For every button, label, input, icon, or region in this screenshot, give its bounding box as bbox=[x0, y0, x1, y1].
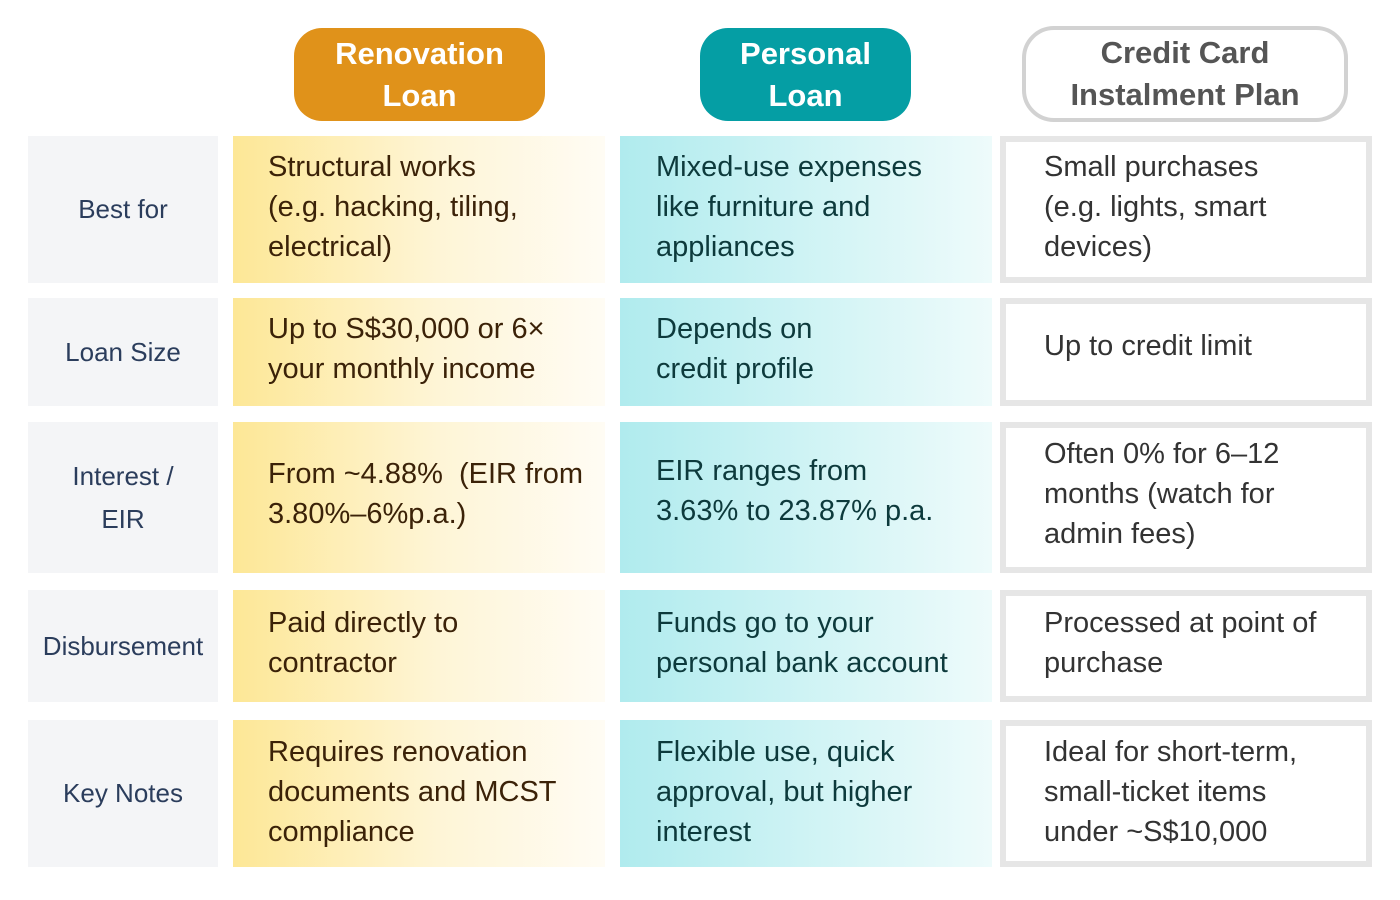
cell: personal key notes: Flexible use, quick bbox=[656, 736, 895, 768]
cell: personal disbursement: personal bank account bbox=[656, 647, 948, 679]
header: Credit Card Instalment Plan bbox=[1022, 26, 1348, 122]
row label: Best for bbox=[28, 136, 218, 283]
cell: renovation best for: electrical) bbox=[268, 231, 392, 263]
cell: personal interest: 3.63% to 23.87% p.a. bbox=[656, 495, 933, 527]
cell: personal interest bbox=[620, 422, 992, 573]
cell: credit loan size bbox=[1000, 298, 1372, 406]
cell: renovation best for bbox=[233, 136, 605, 283]
cell: renovation key notes: documents and MCST bbox=[268, 776, 557, 808]
cell: renovation loan size: your monthly income bbox=[268, 353, 536, 385]
cell: personal key notes bbox=[620, 720, 992, 867]
row label: Interest / EIR: Interest / bbox=[72, 460, 174, 490]
cell: personal loan size bbox=[620, 298, 992, 406]
row label: Disbursement bbox=[28, 590, 218, 702]
cell: renovation loan size bbox=[233, 298, 605, 406]
header: Personal Loan bbox=[700, 28, 911, 121]
cell: credit best for: devices) bbox=[1044, 231, 1152, 263]
cell: credit best for: Small purchases bbox=[1044, 151, 1258, 183]
cell: credit loan size: Up to credit limit bbox=[1044, 330, 1252, 362]
cell: credit interest: admin fees) bbox=[1044, 518, 1196, 550]
cell: renovation key notes bbox=[233, 720, 605, 867]
cell: personal best for: like furniture and bbox=[656, 191, 870, 223]
cell: credit interest bbox=[1000, 422, 1372, 573]
cell: renovation best for: Structural works bbox=[268, 151, 476, 183]
cell: renovation best for: (e.g. hacking, tiling, bbox=[268, 191, 518, 223]
cell: credit disbursement bbox=[1000, 590, 1372, 702]
cell: credit key notes: under ~S$10,000 bbox=[1044, 816, 1267, 848]
cell: credit interest: Often 0% for 6–12 bbox=[1044, 438, 1279, 470]
cell: credit interest: months (watch for bbox=[1044, 478, 1274, 510]
cell: credit key notes bbox=[1000, 720, 1372, 867]
cell: renovation disbursement: Paid directly to bbox=[268, 607, 458, 639]
row label: Best for: Best for bbox=[78, 194, 168, 224]
row label: Loan Size: Loan Size bbox=[65, 336, 181, 366]
cell: renovation disbursement: contractor bbox=[268, 647, 397, 679]
cell: personal interest: EIR ranges from bbox=[656, 455, 867, 487]
cell: renovation disbursement bbox=[233, 590, 605, 702]
cell: personal loan size: credit profile bbox=[656, 353, 814, 385]
cell: renovation interest: 3.80%–6%p.a.) bbox=[268, 498, 466, 530]
row label: Disbursement: Disbursement bbox=[43, 630, 203, 660]
cell: renovation key notes: Requires renovation bbox=[268, 736, 528, 768]
cell: personal best for bbox=[620, 136, 992, 283]
header: Renovation Loan bbox=[294, 28, 545, 121]
row label: Loan Size bbox=[28, 298, 218, 406]
row label: Key Notes: Key Notes bbox=[63, 778, 183, 808]
header: Personal Loan: Loan bbox=[768, 78, 843, 112]
cell: renovation interest bbox=[233, 422, 605, 573]
row label: Key Notes bbox=[28, 720, 218, 867]
header: Renovation Loan: Renovation bbox=[335, 36, 504, 70]
row label: Interest / EIR: EIR bbox=[101, 504, 145, 534]
cell: credit key notes: Ideal for short-term, bbox=[1044, 736, 1297, 768]
cell: credit best for bbox=[1000, 136, 1372, 283]
header: Credit Card Instalment Plan: Credit Card bbox=[1101, 35, 1269, 70]
header: Personal Loan: Personal bbox=[740, 36, 871, 70]
cell: personal best for: appliances bbox=[656, 231, 795, 263]
header: Renovation Loan: Loan bbox=[382, 78, 457, 112]
cell: renovation key notes: compliance bbox=[268, 816, 415, 848]
cell: renovation loan size: Up to S$30,000 or 6× bbox=[268, 313, 545, 345]
cell: personal best for: Mixed-use expenses bbox=[656, 151, 922, 183]
row label: Interest / EIR bbox=[28, 422, 218, 573]
cell: credit key notes: small-ticket items bbox=[1044, 776, 1266, 808]
cell: personal key notes: approval, but higher bbox=[656, 776, 912, 808]
cell: renovation interest: From ~4.88% (EIR from bbox=[268, 458, 583, 490]
cell: personal key notes: interest bbox=[656, 816, 751, 848]
header: Credit Card Instalment Plan: Instalment Plan bbox=[1070, 77, 1300, 112]
cell: personal loan size: Depends on bbox=[656, 313, 812, 345]
cell: credit best for: (e.g. lights, smart bbox=[1044, 191, 1266, 223]
cell: personal disbursement bbox=[620, 590, 992, 702]
cell: personal disbursement: Funds go to your bbox=[656, 607, 874, 639]
cell: credit disbursement: Processed at point of bbox=[1044, 607, 1316, 639]
cell: credit disbursement: purchase bbox=[1044, 647, 1163, 679]
